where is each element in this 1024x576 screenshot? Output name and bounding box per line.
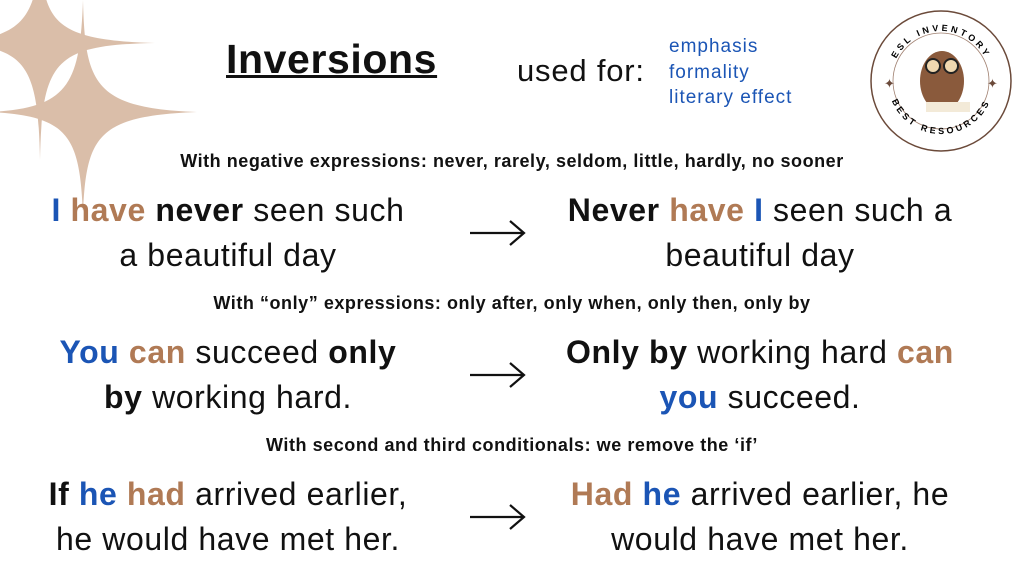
sentence 2 right	[566, 334, 954, 415]
heading: only: With “only” expressions: only after, only when, only then, only by	[213, 293, 811, 313]
heading: negative: With negative expressions: never, rarely, seldom, little, hardly, no sooner	[180, 151, 844, 171]
uses list: emphasis	[669, 36, 758, 57]
sentence 1 left: I have never seen such	[52, 192, 404, 228]
sentence 1 left	[52, 192, 404, 273]
sentence 1 right: Never have I seen such a	[568, 192, 952, 228]
uses list: literary effect	[669, 87, 792, 108]
sentence 3 left: he would have met her.	[56, 521, 400, 557]
logo: ESL Inventory: BEST RESOURCES	[892, 98, 988, 134]
arrow 1	[470, 220, 526, 246]
sentence 2 left: by working hard.	[104, 379, 352, 415]
sentence 2 right: Only by working hard can	[566, 334, 954, 370]
logo: ESL Inventory	[870, 10, 1012, 152]
uses list	[669, 36, 792, 108]
arrow 2	[470, 362, 526, 388]
decorative stars	[0, 0, 196, 210]
heading: conditionals: With second and third conditionals: we remove the ‘if’	[266, 435, 758, 455]
sentence 1 right: beautiful day	[665, 237, 855, 273]
logo: ESL Inventory: ✦	[987, 76, 998, 91]
sentence 3 left: If he had arrived earlier,	[49, 476, 407, 512]
title: Inversions	[226, 36, 437, 82]
sentence 2 left	[60, 334, 396, 415]
sentence 3 right: Had he arrived earlier, he	[571, 476, 949, 512]
uses list: formality	[669, 62, 750, 82]
sentence 3 right: would have met her.	[611, 521, 909, 557]
sentence 3 left	[49, 476, 407, 557]
sentence 2 right: you succeed.	[659, 379, 861, 415]
sentence 1 left: a beautiful day	[119, 237, 337, 273]
used for label: used for:	[517, 53, 645, 88]
arrow 3	[470, 504, 526, 530]
sentence 3 right	[571, 476, 949, 557]
sentence 1 right	[568, 192, 952, 273]
sentence 2 left: You can succeed only	[60, 334, 396, 370]
logo: ESL Inventory: ✦	[884, 76, 895, 91]
logo: ESL Inventory: ESL INVENTORY	[891, 24, 990, 58]
